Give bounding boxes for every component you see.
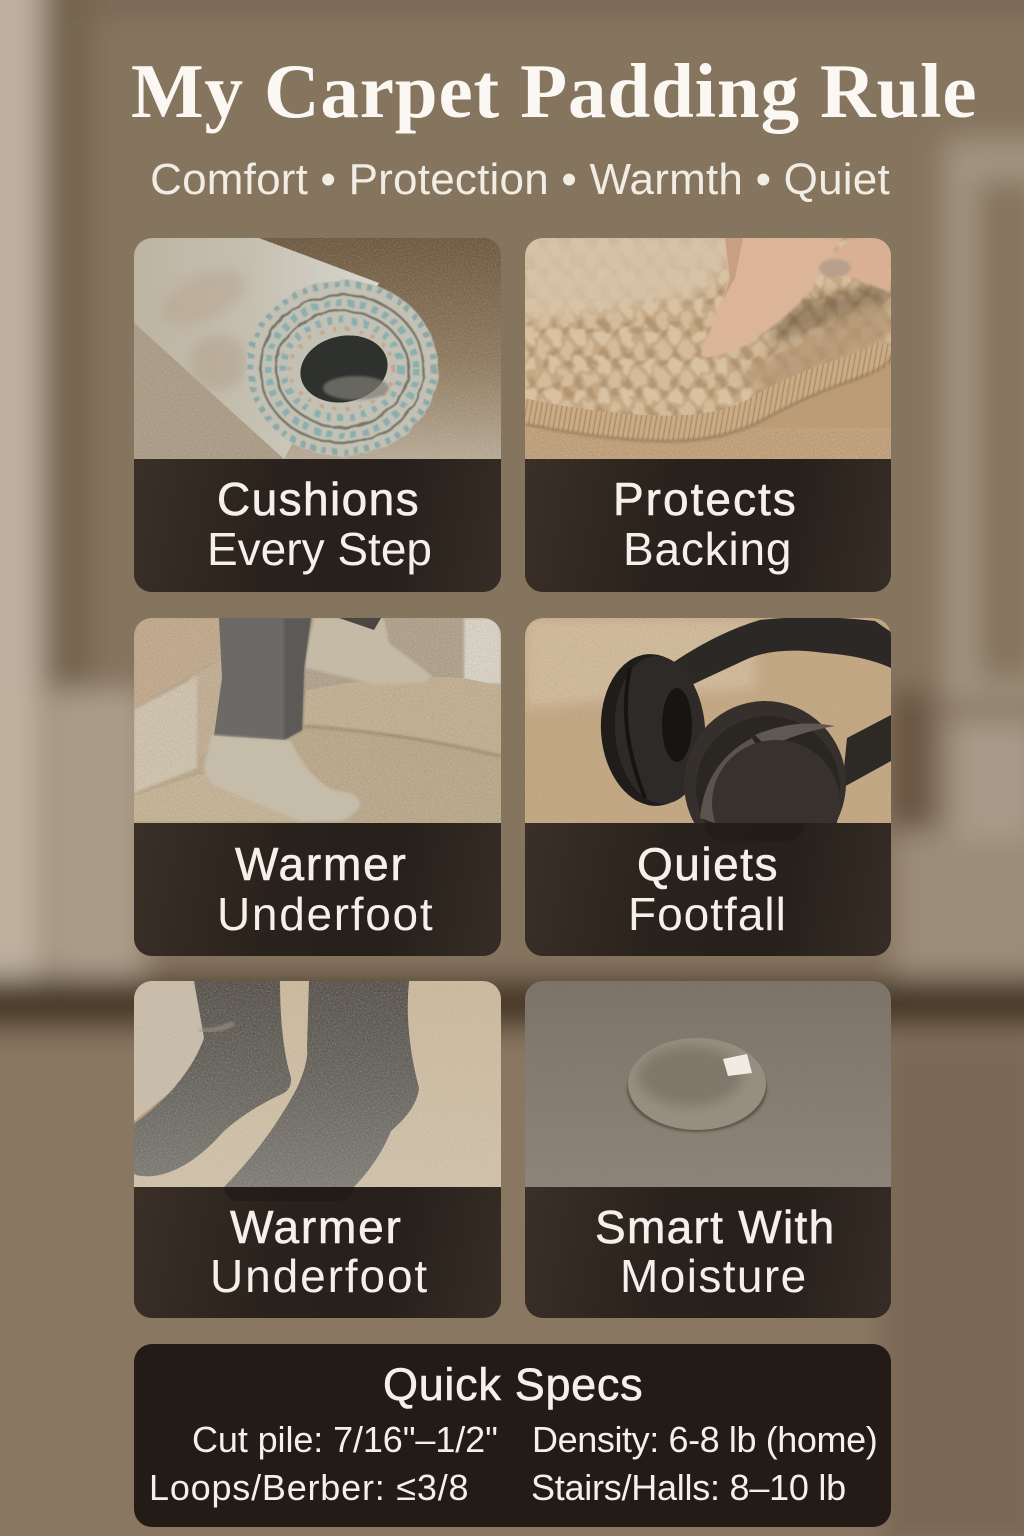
caption background	[134, 823, 501, 956]
caption second line: Moisture	[620, 1250, 808, 1302]
caption heading: Cushions	[217, 473, 420, 525]
caption second line: Footfall	[628, 888, 787, 940]
photo: carpet pile and finger	[525, 238, 891, 459]
panel: smart with moisture	[525, 981, 891, 1318]
caption background	[134, 459, 501, 592]
caption heading: Warmer	[235, 838, 408, 890]
caption background	[134, 1187, 501, 1318]
specs heading: Quick Specs	[383, 1359, 643, 1410]
photo: socked feet on stairs	[134, 618, 501, 823]
photo: rolled carpet padding	[134, 238, 501, 459]
panel: quick specs	[134, 1344, 891, 1527]
panel: warmer underfoot socks	[134, 981, 501, 1318]
caption second line: Backing	[623, 523, 792, 575]
panel: cushions every step	[134, 238, 501, 592]
title: My Carpet Padding Rule	[131, 48, 977, 134]
caption heading: Quiets	[637, 838, 779, 890]
spec: cut pile: Cut pile: 7/16"–1/2"	[192, 1419, 498, 1460]
headphone shadow over caption	[705, 823, 805, 841]
caption second line: Underfoot	[210, 1250, 429, 1302]
caption heading: Smart With	[595, 1201, 835, 1253]
caption heading: Protects	[613, 473, 798, 525]
spec: loops berber: Loops/Berber: ≤3/8	[149, 1467, 469, 1508]
caption background	[525, 459, 891, 592]
photo: water droplet on carpet	[525, 981, 891, 1187]
photo: grey socks on carpet	[134, 981, 501, 1187]
panel: quiets footfall	[525, 618, 891, 956]
panel: warmer underfoot stairs	[134, 618, 501, 956]
spec: density: Density: 6-8 lb (home)	[532, 1419, 877, 1460]
caption second line: Underfoot	[217, 888, 434, 940]
spec: stairs halls: Stairs/Halls: 8–10 lb	[531, 1467, 846, 1508]
caption heading: Warmer	[230, 1201, 403, 1253]
panel: protects backing	[525, 238, 891, 592]
caption background	[525, 1187, 891, 1318]
sock shadow over caption	[224, 1187, 354, 1201]
photo: headphones on carpet	[525, 618, 891, 823]
subtitle: Comfort • Protection • Warmth • Quiet	[150, 155, 890, 204]
caption background	[525, 823, 891, 956]
caption second line: Every Step	[207, 523, 432, 575]
